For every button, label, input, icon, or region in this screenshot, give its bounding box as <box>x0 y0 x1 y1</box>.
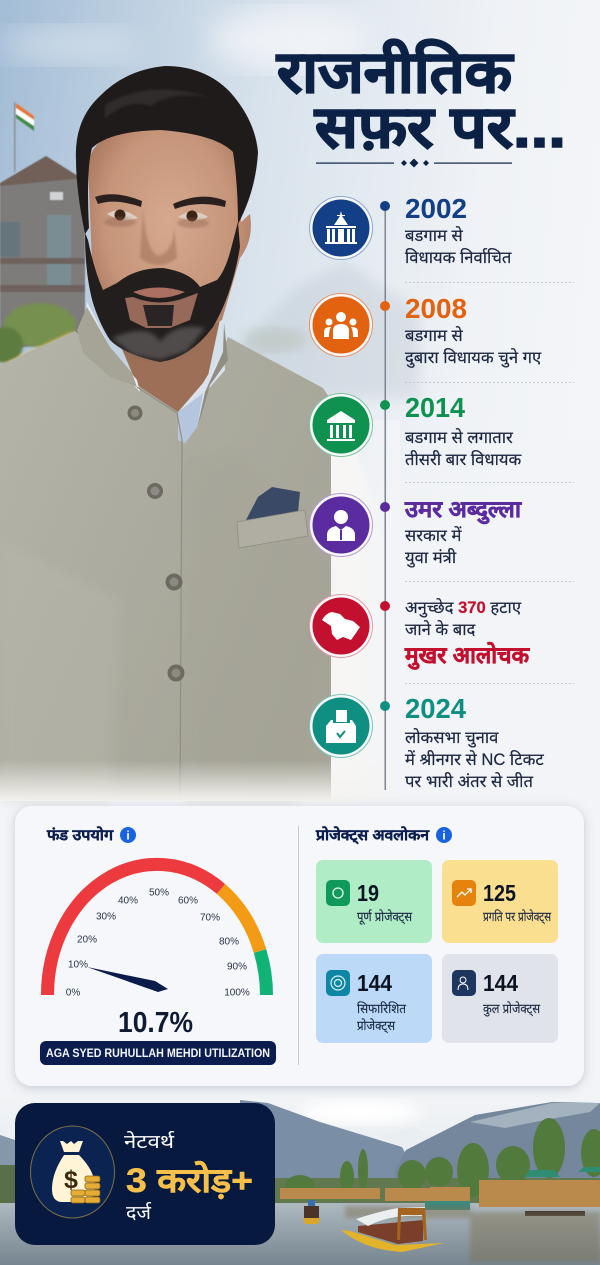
icon: government building <box>325 211 357 244</box>
timeline item: 2002: बडगाम से <box>405 226 464 245</box>
icon: map <box>322 612 360 640</box>
timeline <box>310 193 544 791</box>
timeline item: Article 370: अनुच्छेद 370 हटाए <box>405 598 522 618</box>
gauge value: 10.7% <box>118 1007 193 1039</box>
pocket with square <box>246 487 300 520</box>
timeline item: 2002: विधायक निर्वाचित <box>405 248 512 267</box>
gauge chart <box>47 864 266 998</box>
timeline item: 2024 <box>310 693 544 791</box>
stat: total: 144 <box>483 970 518 996</box>
stat: in progress <box>442 860 558 943</box>
placket <box>137 387 182 800</box>
gauge label <box>40 1041 276 1065</box>
timeline item: 2008: बडगाम से <box>405 326 464 345</box>
timeline item: 2014: बडगाम से लगातार <box>405 428 514 447</box>
jacket shading <box>184 450 325 800</box>
timeline item: Article 370: जाने के बाद <box>405 620 476 639</box>
panel: net worth: दर्ज <box>126 1201 152 1224</box>
panel: funds and projects card <box>15 806 584 1086</box>
panel: net worth <box>15 1103 275 1245</box>
shirt <box>86 302 140 392</box>
projects heading: प्रोजेक्ट्स अवलोकन <box>315 826 430 845</box>
nose shading <box>140 210 177 265</box>
icon: people <box>324 312 358 339</box>
timeline item: 2008: 2008 <box>405 293 467 324</box>
fund heading: फंड उपयोग <box>46 826 114 844</box>
panel: lake scenery <box>0 1095 600 1265</box>
timeline item: Omar Abdullah: युवा मंत्री <box>405 548 457 568</box>
lower beard and chin <box>125 293 198 328</box>
stat: completed: पूर्ण प्रोजेक्ट्स <box>357 909 412 925</box>
jacket <box>0 331 331 800</box>
icon: money bag: $ <box>64 1166 78 1194</box>
timeline item: Omar Abdullah <box>310 494 522 568</box>
gauge chart: 60% <box>178 896 198 906</box>
timeline item: 2002 <box>310 193 512 267</box>
stat: recommended <box>316 954 432 1043</box>
timeline item: 2008: दुबारा विधायक चुने गए <box>405 348 542 368</box>
gauge chart: 20% <box>77 934 97 946</box>
title divider <box>316 158 512 168</box>
timeline item: 2024: 2024 <box>405 693 466 724</box>
neck <box>110 310 222 412</box>
timeline item: Article 370 <box>310 594 530 670</box>
fund heading: i <box>126 828 130 842</box>
icon: institution <box>327 411 355 441</box>
boat <box>303 1200 444 1252</box>
timeline item: Omar Abdullah: सरकार में <box>405 526 462 545</box>
portrait <box>0 66 395 800</box>
face <box>88 126 251 355</box>
timeline item: Article 370: मुखर आलोचक <box>404 641 530 670</box>
bottom fade of portrait <box>0 760 400 801</box>
gauge chart: 10% <box>68 960 88 970</box>
stat: in progress: 125 <box>483 880 516 906</box>
timeline item: 2024: लोकसभा चुनाव <box>405 728 499 748</box>
projects heading <box>315 826 452 845</box>
timeline item: 2014: तीसरी बार विधायक <box>405 450 521 469</box>
stat: in progress: प्रगति पर प्रोजेक्ट्स <box>483 909 551 925</box>
gauge chart: 90% <box>227 962 247 972</box>
title <box>276 39 566 160</box>
stat: total: कुल प्रोजेक्ट्स <box>483 1001 540 1017</box>
stat: recommended: 144 <box>357 970 392 996</box>
beard <box>85 222 240 362</box>
stat: recommended: सिफारिशित <box>357 1001 407 1016</box>
panel: net worth: नेटवर्थ <box>124 1130 175 1153</box>
icon: money bag <box>52 1141 100 1203</box>
timeline item: 2008 <box>310 293 542 368</box>
timeline item: 2024: पर भारी अंतर से जीत <box>405 772 533 791</box>
timeline item: 2014 <box>310 392 521 469</box>
projects heading: i <box>442 828 446 842</box>
gauge chart: 100% <box>224 988 250 998</box>
reflections <box>345 1206 600 1262</box>
fund heading <box>46 826 136 844</box>
stat: completed <box>316 860 432 943</box>
mouth <box>133 288 185 298</box>
building with flag <box>0 102 85 365</box>
icon: ballot box <box>326 710 356 743</box>
gauge chart: 50% <box>149 888 169 898</box>
needle <box>87 967 168 992</box>
eyes and brows <box>95 194 226 228</box>
stat: total <box>442 954 558 1043</box>
gauge chart: 30% <box>96 912 116 922</box>
right fade over sleeve <box>345 420 400 810</box>
white sleeve <box>290 385 395 800</box>
title: राजनीतिक <box>276 39 515 105</box>
timeline item: 2014: 2014 <box>405 392 465 423</box>
icon: minister <box>327 510 355 541</box>
stat: recommended: प्रोजेक्ट्स <box>357 1018 395 1034</box>
panel: net worth: 3 करोड़+ <box>126 1160 253 1200</box>
timeline item: Omar Abdullah: उमर अब्दुल्ला <box>404 496 522 525</box>
title: सफ़र पर... <box>314 95 566 160</box>
gauge chart: 40% <box>118 896 138 906</box>
gauge chart: 80% <box>219 936 239 948</box>
hair <box>76 66 258 234</box>
collar <box>77 307 137 387</box>
stat: completed: 19 <box>357 880 379 906</box>
gauge chart: 0% <box>66 988 80 998</box>
gauge chart: 70% <box>200 912 220 924</box>
timeline item: 2024: में श्रीनगर से NC टिकट <box>405 750 544 769</box>
buttons <box>128 406 142 420</box>
timeline item: 2002: 2002 <box>405 193 467 224</box>
gauge label: AGA SYED RUHULLAH MEHDI UTILIZATION <box>46 1048 270 1060</box>
